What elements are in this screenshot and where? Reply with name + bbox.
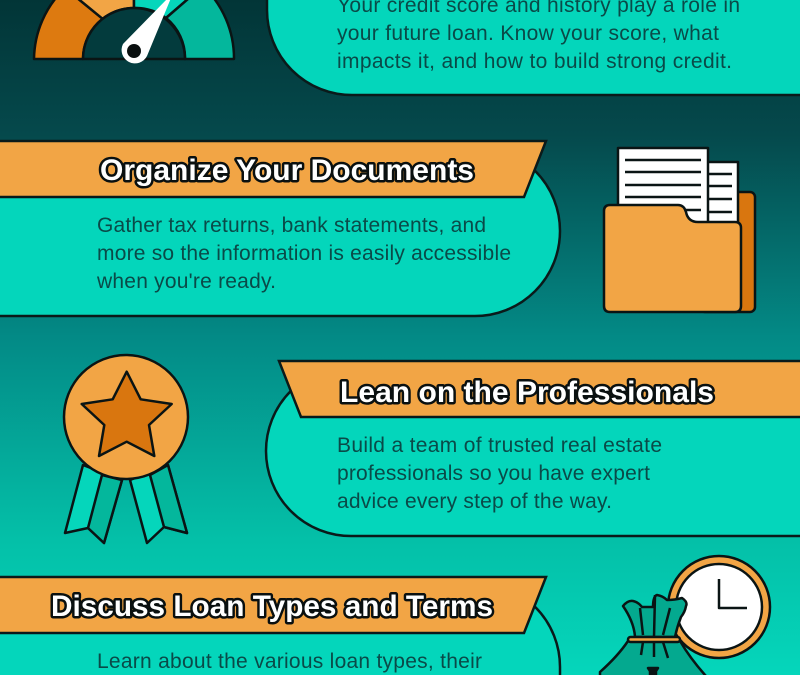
text: professionals body copy: Build a team of trusted real estate	[337, 434, 662, 457]
icon: clock	[668, 556, 770, 658]
banner: discuss loan types and terms	[0, 577, 546, 633]
panel: organize your documents	[0, 141, 560, 316]
icon: folder with documents	[604, 148, 755, 312]
banner: organize your documents	[0, 141, 546, 197]
text: credit body copy	[337, 0, 740, 73]
panel: lean on the professionals	[266, 361, 800, 536]
heading: discuss loan types and terms: Discuss Loan Types and Terms	[51, 590, 493, 623]
panel: check your credit	[267, 0, 800, 95]
icon: award medal	[64, 355, 188, 543]
icon: credit score gauge	[34, 0, 234, 63]
text: documents body copy: when you're ready.	[96, 270, 276, 293]
text: credit body copy: impacts it, and how to build strong credit.	[337, 50, 732, 73]
icon: money bag	[600, 595, 710, 675]
banner: lean on the professionals	[279, 361, 800, 417]
text: professionals body copy: advice every step of the way.	[337, 490, 612, 513]
text: professionals body copy	[337, 434, 662, 513]
text: documents body copy: more so the information is easily accessible	[97, 242, 511, 265]
text: professionals body copy: professionals so you have expert	[337, 462, 650, 485]
icon: clock and money bag	[600, 556, 770, 675]
heading: lean on the professionals: Lean on the Professionals	[340, 376, 714, 409]
heading: organize your documents: Organize Your Documents	[100, 154, 474, 187]
panel: discuss loan types and terms	[0, 577, 560, 675]
text: credit body copy: your future loan. Know your score, what	[337, 22, 719, 45]
text: loan body copy: Learn about the various loan types, their	[97, 650, 482, 673]
text: documents body copy	[96, 214, 511, 293]
text: documents body copy: Gather tax returns, bank statements, and	[97, 214, 486, 237]
